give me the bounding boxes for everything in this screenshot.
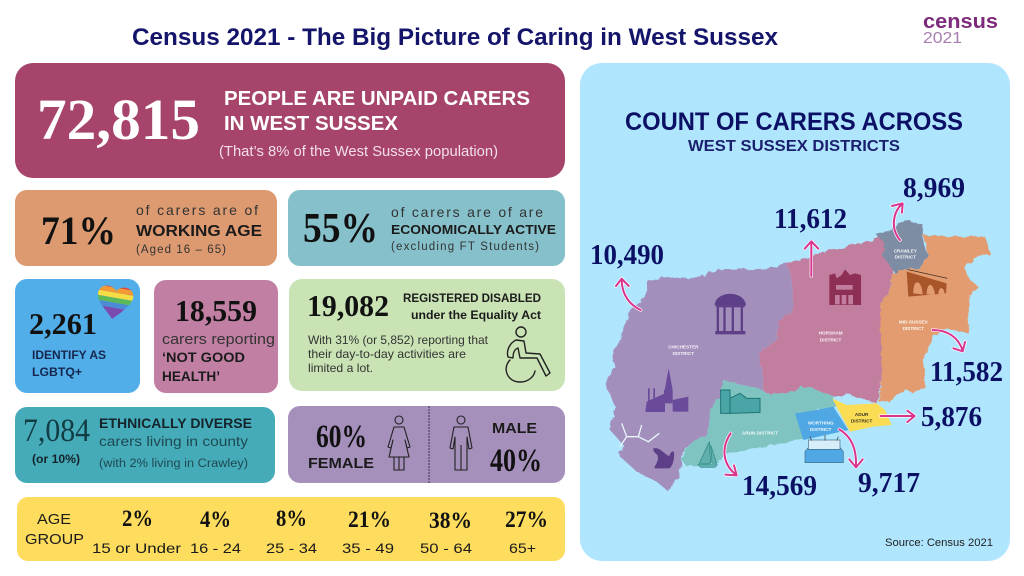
icon: castle bbox=[721, 390, 760, 413]
panel: gender split: FEMALE bbox=[308, 456, 374, 472]
icon: male figure bbox=[450, 416, 472, 470]
panel: age group: 50 - 64 bbox=[420, 541, 473, 556]
district: Adur: DISTRICT bbox=[851, 419, 873, 424]
panel: ethnically diverse bbox=[15, 407, 275, 483]
panel: registered disabled: limited a lot. bbox=[308, 361, 373, 375]
icon: rainbow heart bbox=[98, 286, 134, 319]
district: Crawley bbox=[875, 220, 928, 273]
panel: economically active bbox=[288, 190, 565, 266]
panel: gender split: 40% bbox=[490, 443, 542, 479]
title: Census 2021 - The Big Picture of Caring in West Sussex bbox=[132, 24, 779, 51]
panel: LGBTQ+: LGBTQ+ bbox=[32, 365, 82, 379]
panel: gender split bbox=[288, 406, 565, 483]
panel: not good health: 18,559 bbox=[175, 293, 257, 328]
panel: economically active: 55% bbox=[303, 206, 378, 252]
panel: headline unpaid carers bbox=[15, 63, 565, 178]
district: Mid-Sussex bbox=[878, 235, 990, 402]
panel: working age: of carers are of bbox=[136, 202, 258, 218]
panel: age group: 65+ bbox=[509, 541, 536, 556]
district counts: 9,717 bbox=[858, 468, 920, 499]
district: Adur: ADUR bbox=[855, 412, 869, 417]
panel: age group: 2% bbox=[122, 506, 153, 531]
panel: ethnically diverse: (or 10%) bbox=[32, 452, 80, 466]
district counts: 10,490 bbox=[590, 240, 664, 271]
panel: age group: AGE bbox=[37, 511, 71, 528]
icon: pier bbox=[805, 435, 843, 463]
panel: age group bbox=[17, 497, 565, 561]
panel: LGBTQ+ bbox=[15, 279, 140, 393]
district: Worthing bbox=[795, 407, 848, 463]
icon: sailboat bbox=[698, 442, 717, 467]
panel: age group: 16 - 24 bbox=[190, 541, 242, 556]
icon: viaduct bbox=[907, 269, 947, 297]
district: Horsham: HORSHAM bbox=[819, 330, 843, 335]
census 2021 logo: 2021 bbox=[923, 30, 962, 47]
icon: wheelchair user bbox=[506, 327, 550, 382]
icon: cathedral bbox=[645, 368, 688, 412]
district counts: 5,876 bbox=[921, 402, 982, 433]
panel: economically active: (excluding FT Students) bbox=[391, 241, 539, 253]
district: Arun: ARUN DISTRICT bbox=[742, 430, 778, 435]
panel: district map bbox=[580, 63, 1010, 561]
panel: age group: 8% bbox=[276, 506, 307, 531]
panel: headline unpaid carers: (That’s 8% of the West Sussex population) bbox=[219, 144, 498, 160]
panel: economically active: ECONOMICALLY ACTIVE bbox=[391, 222, 556, 237]
district counts: 8,969 bbox=[903, 173, 965, 204]
icon: female figure bbox=[388, 416, 410, 470]
harbour inlet bbox=[620, 423, 659, 447]
panel: gender split: 60% bbox=[316, 419, 367, 455]
panel: age group: 15 or Under bbox=[92, 541, 182, 556]
panel: economically active: of carers are of are bbox=[391, 204, 543, 220]
panel: registered disabled: With 31% (or 5,852) reporting that bbox=[308, 333, 489, 347]
district: Chichester bbox=[605, 263, 793, 492]
district: Horsham: DISTRICT bbox=[820, 337, 842, 342]
panel: ethnically diverse: (with 2% living in Crawley) bbox=[99, 458, 248, 470]
district: Worthing: WORTHING bbox=[808, 420, 834, 425]
panel: ethnically diverse: ETHNICALLY DIVERSE bbox=[99, 416, 252, 431]
panel: registered disabled: their day-to-day activities are bbox=[308, 347, 466, 361]
panel: age group: GROUP bbox=[25, 531, 84, 548]
district counts bbox=[590, 173, 1003, 502]
source note: Source: Census 2021 bbox=[885, 537, 993, 549]
panel: registered disabled bbox=[289, 279, 565, 391]
district: Chichester: CHICHESTER bbox=[668, 344, 699, 349]
map heading: WEST SUSSEX DISTRICTS bbox=[688, 138, 900, 155]
panel: age group: 35 - 49 bbox=[342, 541, 394, 556]
district: Arun bbox=[682, 380, 840, 467]
census 2021 logo: census bbox=[923, 11, 998, 33]
panel: not good health bbox=[154, 280, 278, 393]
panel: not good health: carers reporting bbox=[162, 331, 275, 348]
panel: headline unpaid carers: 72,815 bbox=[37, 87, 200, 152]
map heading: COUNT OF CARERS ACROSS bbox=[625, 108, 963, 136]
panel: working age: (Aged 16 – 65) bbox=[136, 244, 226, 256]
panel: LGBTQ+: 2,261 bbox=[29, 306, 97, 341]
panel: gender split: MALE bbox=[492, 420, 537, 437]
district: Crawley: CRAWLEY bbox=[894, 248, 918, 253]
panel: age group: 27% bbox=[505, 507, 548, 532]
icon: town hall bbox=[829, 269, 861, 305]
panel: age group: 38% bbox=[429, 508, 472, 533]
panel: working age: WORKING AGE bbox=[136, 223, 262, 240]
district: Adur bbox=[832, 398, 892, 432]
panel: not good health: ‘NOT GOOD bbox=[162, 349, 245, 365]
district: Worthing: DISTRICT bbox=[810, 427, 832, 432]
panel: LGBTQ+: IDENTIFY AS bbox=[32, 348, 106, 362]
icon: rotunda bbox=[715, 294, 746, 334]
district: Chichester: DISTRICT bbox=[673, 351, 694, 356]
panel: working age bbox=[15, 190, 277, 266]
panel: working age: 71% bbox=[41, 208, 116, 253]
panel: ethnically diverse: 7,084 bbox=[23, 413, 90, 449]
panel: headline unpaid carers: PEOPLE ARE UNPAID CARERS bbox=[224, 88, 530, 110]
district: Mid-Sussex: DISTRICT bbox=[903, 326, 924, 331]
panel: age group: 4% bbox=[200, 507, 231, 532]
district counts: 14,569 bbox=[742, 471, 817, 502]
panel: not good health: HEALTH’ bbox=[162, 368, 220, 384]
panel: age group: 25 - 34 bbox=[266, 541, 318, 556]
district counts: 11,582 bbox=[930, 357, 1003, 388]
panel: age group: 21% bbox=[348, 507, 391, 532]
district counts: 11,612 bbox=[774, 204, 847, 235]
panel: registered disabled: 19,082 bbox=[307, 288, 389, 323]
district: Horsham bbox=[758, 235, 893, 403]
map heading bbox=[625, 108, 963, 155]
panel: headline unpaid carers: IN WEST SUSSEX bbox=[224, 113, 399, 135]
map of districts bbox=[605, 203, 990, 492]
panel: registered disabled: REGISTERED DISABLED bbox=[403, 291, 541, 305]
icon: seal bbox=[653, 448, 674, 468]
panel: ethnically diverse: carers living in county bbox=[99, 433, 248, 449]
district: Mid-Sussex: MID-SUSSEX bbox=[899, 319, 929, 324]
arrows bbox=[616, 203, 965, 475]
panel: registered disabled: under the Equality Act bbox=[411, 308, 541, 322]
district: Crawley: DISTRICT bbox=[895, 255, 916, 260]
census 2021 logo bbox=[923, 11, 998, 47]
